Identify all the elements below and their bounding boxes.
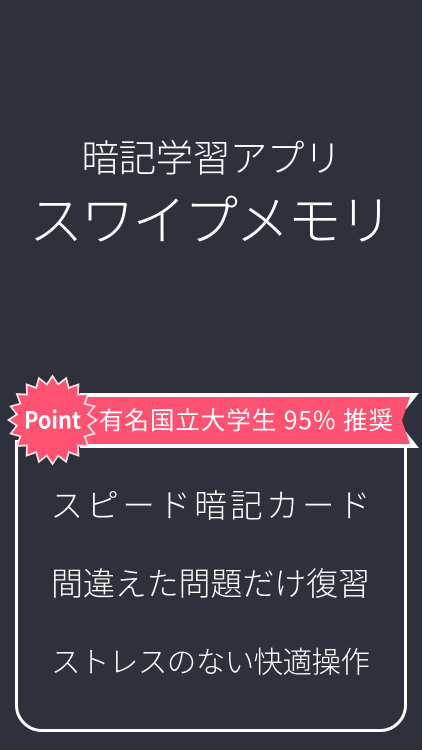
feature: speed flashcards: スピード暗記カード: [50, 480, 370, 527]
badge: point starburst: [8, 376, 96, 464]
title: app category: 暗記学習アプリ: [82, 128, 342, 182]
ribbon banner: [80, 393, 419, 448]
panel: feature list outline: [16, 440, 406, 730]
feature: review mistakes: 間違えた問題だけ復習: [51, 559, 370, 605]
feature: stress-free operation: ストレスのない快適操作: [51, 640, 370, 682]
badge text: Point: [24, 402, 81, 436]
title: app name: スワイプメモリ: [29, 177, 393, 256]
ribbon text: 有名国立大学生 95% 推奨: [99, 402, 393, 437]
